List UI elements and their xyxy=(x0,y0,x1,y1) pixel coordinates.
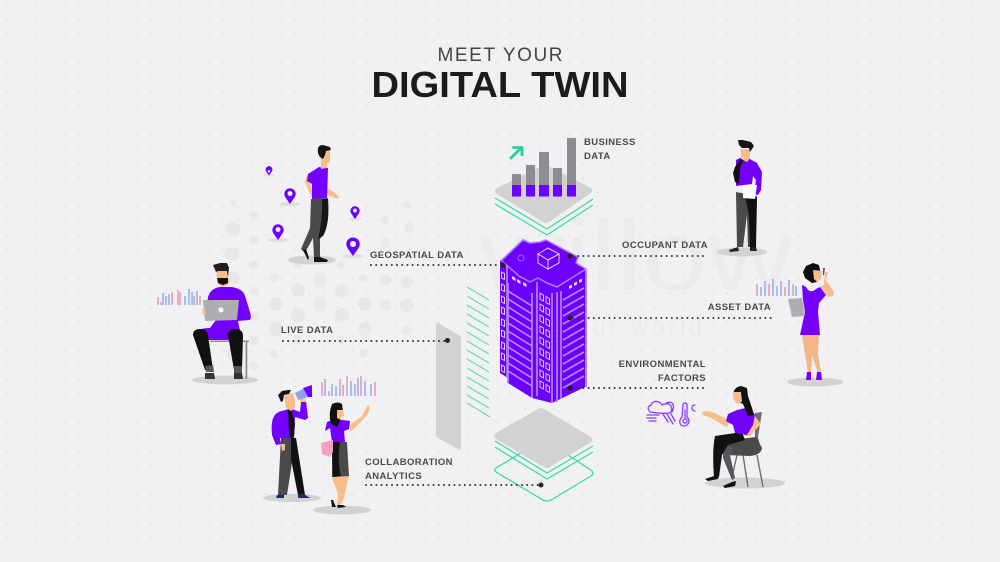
roof xyxy=(502,240,586,287)
title: DIGITAL TWIN xyxy=(372,64,628,105)
person: man with megaphone xyxy=(263,385,321,502)
connector: collaboration analytics xyxy=(365,457,544,488)
striped face right xyxy=(563,288,584,388)
windows xyxy=(502,272,550,392)
bar chart: seated man xyxy=(157,289,201,305)
building xyxy=(500,239,586,403)
map pins xyxy=(264,166,363,258)
icons: weather and thermometer xyxy=(647,401,695,426)
arrow: growth xyxy=(511,148,522,158)
connector: collaboration analytics: ANALYTICS xyxy=(365,471,422,482)
gray panel xyxy=(436,323,461,450)
person: woman with folder xyxy=(313,402,371,514)
connector: occupant data xyxy=(568,240,708,258)
label: business data: BUSINESS xyxy=(584,137,636,148)
watermark: willow: your world xyxy=(560,314,702,341)
connector: live data: LIVE DATA xyxy=(281,325,333,336)
green hatch lines xyxy=(467,287,490,417)
connector: asset data: ASSET DATA xyxy=(708,302,771,313)
title: MEET YOUR xyxy=(438,45,562,66)
connector: geospatial: GEOSPATIAL DATA xyxy=(370,250,464,261)
watermark: willow: willow xyxy=(479,200,793,312)
connector: occupant data: OCCUPANT DATA xyxy=(622,240,708,251)
bar chart: asset xyxy=(756,279,797,296)
label: business data: DATA xyxy=(584,151,611,162)
roof cube xyxy=(518,248,559,269)
bar chart: business data xyxy=(512,138,576,196)
striped face left xyxy=(508,291,532,386)
connector: live data xyxy=(281,325,450,343)
connector: environmental factors: FACTORS xyxy=(658,373,706,384)
watermark: willow xyxy=(479,200,793,341)
person: occupant man xyxy=(717,140,767,256)
connector: environmental factors: ENVIRONMENTAL xyxy=(619,359,706,370)
connector: asset data xyxy=(568,302,772,320)
connector: geospatial xyxy=(370,250,506,268)
connector: environmental factors xyxy=(568,359,706,390)
person: woman in dress xyxy=(787,263,843,386)
label: business data xyxy=(584,137,636,162)
business data platform xyxy=(495,138,593,235)
halftone circles xyxy=(225,200,414,370)
person: seated man xyxy=(192,263,258,384)
person: seated woman xyxy=(702,386,785,488)
top windows xyxy=(512,276,582,289)
side highlights xyxy=(507,262,586,403)
building body xyxy=(500,239,586,403)
bottom platform xyxy=(494,408,593,501)
connector: collaboration analytics: COLLABORATION xyxy=(365,457,453,468)
person: walking man xyxy=(288,145,339,264)
title xyxy=(372,45,628,105)
bar chart: collaboration xyxy=(321,376,376,396)
